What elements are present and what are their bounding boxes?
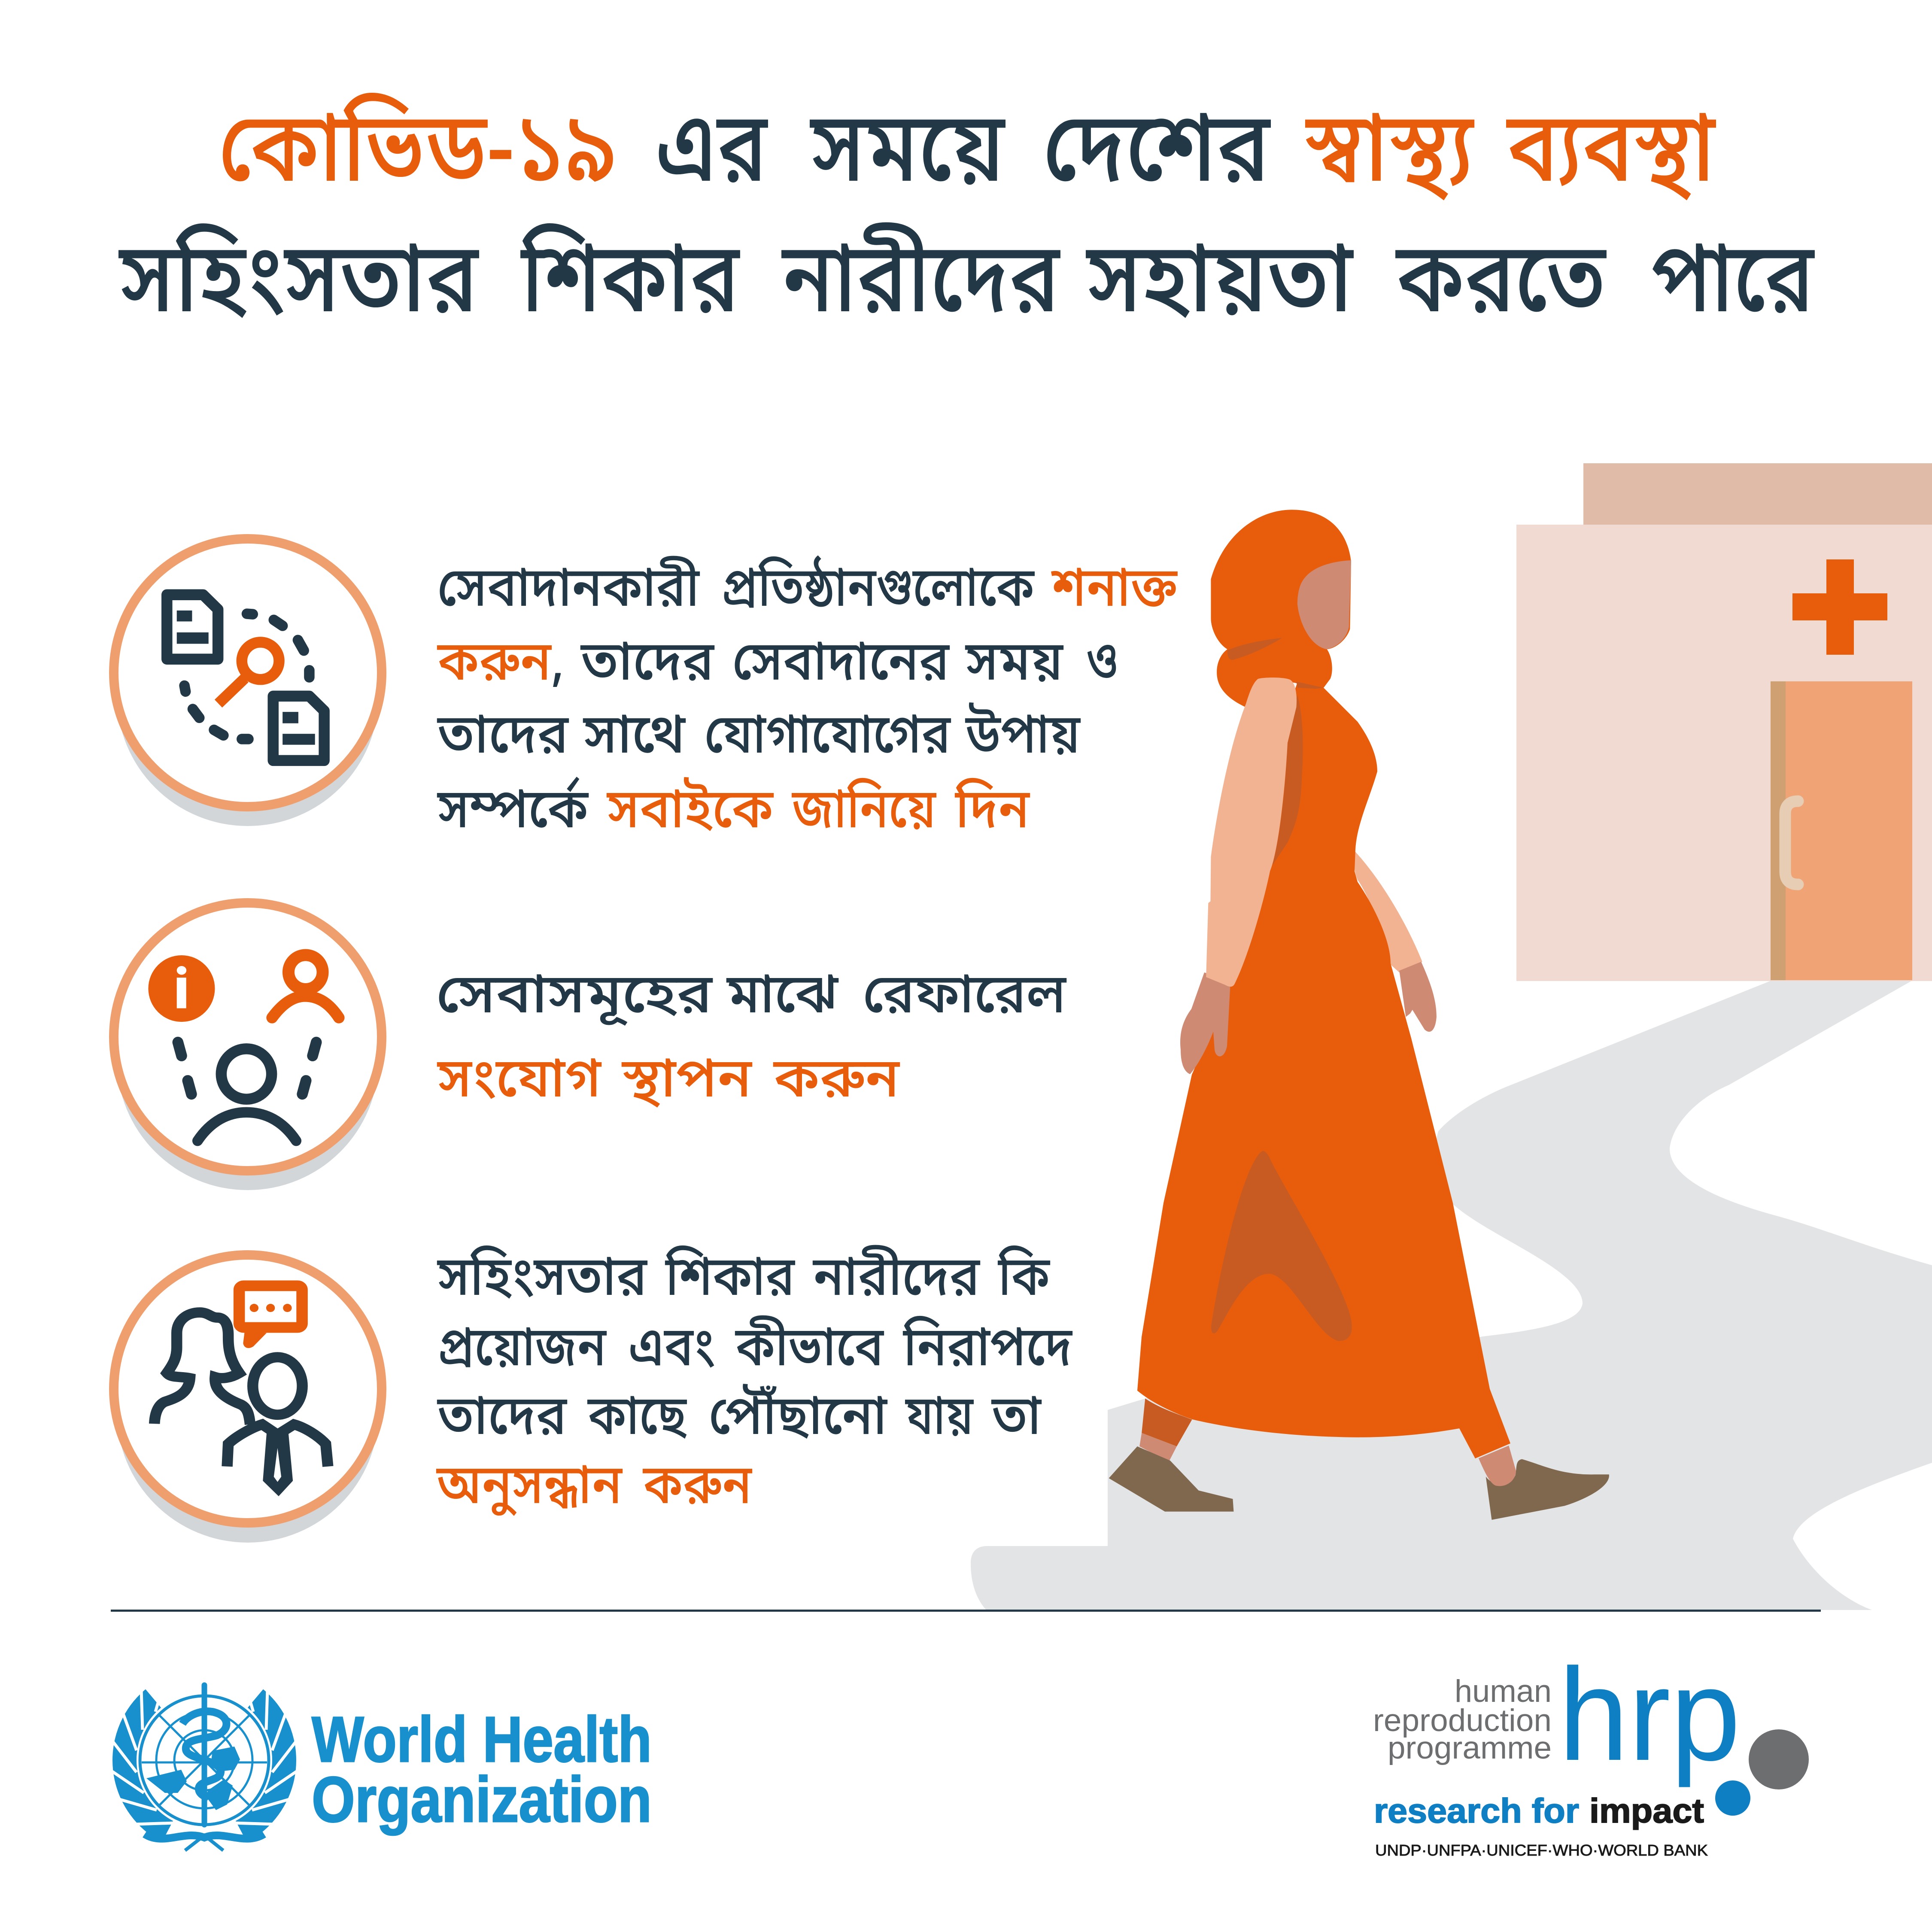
title: সহায়তা xyxy=(1085,222,1354,352)
text: survivor needs: কীভাবে xyxy=(735,1315,884,1388)
text: referral links: করুন xyxy=(773,1047,900,1119)
title xyxy=(118,91,1815,352)
text: survivor needs: করুন xyxy=(642,1453,753,1526)
programme name: reproduction xyxy=(1373,1703,1552,1738)
text: identify services: সম্পর্কে xyxy=(437,777,589,850)
text: identify services: উপায় xyxy=(965,702,1081,775)
text: identify services: যোগাযোগের xyxy=(704,703,951,775)
front hand xyxy=(1180,972,1230,1074)
icon: information and people xyxy=(114,903,382,1190)
woman walking xyxy=(1109,510,1609,1520)
hrp wordmark: hrp xyxy=(1558,1641,1741,1789)
title: স্বাস্থ্য xyxy=(1305,91,1475,221)
icon: documents and magnifier xyxy=(114,539,382,826)
text: identify services: সবাইকে xyxy=(606,777,774,850)
panel: survivor needs xyxy=(114,1245,1073,1543)
World Health Organization wordmark: Organization xyxy=(312,1763,652,1835)
text: survivor needs: নিরাপদে xyxy=(902,1315,1073,1388)
text: identify services: করুন xyxy=(437,630,552,702)
text: survivor needs: পৌঁছানো xyxy=(708,1384,887,1457)
title: পারে xyxy=(1651,222,1815,352)
title: কোভিড-১৯ xyxy=(218,91,617,221)
text: survivor needs: এবং xyxy=(629,1315,715,1388)
tagline: research for xyxy=(1374,1792,1579,1830)
text: referral links: মাঝে xyxy=(726,963,839,1035)
text: survivor needs: প্রয়োজন xyxy=(437,1315,607,1388)
text: referral links: স্থাপন xyxy=(621,1047,753,1119)
programme name: programme xyxy=(1388,1731,1552,1765)
text: referral links: সেবাসমূহের xyxy=(436,963,713,1035)
panel: identify services xyxy=(114,539,1178,850)
door xyxy=(1771,681,1912,980)
skirt fold xyxy=(1211,1151,1352,1341)
title: শিকার xyxy=(520,222,740,352)
World Health Organization wordmark xyxy=(312,1703,652,1835)
text: identify services: তাদের xyxy=(437,703,569,775)
WHO logo xyxy=(110,1673,652,1850)
text: identify services: সাথে xyxy=(583,703,686,775)
title: সময়ে xyxy=(809,91,1006,221)
text: identify services: সময় xyxy=(965,630,1064,702)
text: survivor needs xyxy=(436,1245,1073,1526)
programme name: human xyxy=(1455,1674,1552,1709)
text: identify services: দিন xyxy=(954,778,1030,850)
text: survivor needs: কি xyxy=(997,1245,1050,1318)
panel: referral links xyxy=(114,903,1066,1190)
text: referral links: সংযোগ xyxy=(437,1047,602,1119)
tagline xyxy=(1374,1792,1704,1830)
dress xyxy=(1137,682,1510,1458)
text: survivor needs: কাছে xyxy=(587,1384,687,1457)
tagline: impact xyxy=(1589,1792,1704,1830)
text: identify services: , xyxy=(551,630,564,702)
text: survivor needs: তা xyxy=(991,1384,1042,1457)
text: identify services: সেবাদানের xyxy=(732,630,950,702)
text: survivor needs: সহিংসতার xyxy=(437,1245,647,1318)
title: এর xyxy=(656,91,768,221)
text: identify services: সেবাদানকারী xyxy=(437,556,700,629)
back leg and shoe xyxy=(1109,1398,1233,1512)
HRP logo xyxy=(1373,1641,1809,1859)
text: survivor needs: অনুসন্ধান xyxy=(436,1453,623,1526)
title: করতে xyxy=(1395,222,1607,352)
text: referral links xyxy=(436,963,1066,1119)
text: identify services xyxy=(437,555,1178,850)
title: নারীদের xyxy=(781,222,1060,352)
text: identify services: তাদের xyxy=(580,630,714,702)
cosponsors: UNDP·UNFPA·UNICEF·WHO·WORLD BANK xyxy=(1375,1841,1708,1859)
icon: medical cross xyxy=(1792,559,1887,655)
road xyxy=(971,981,1932,1610)
front foot xyxy=(1479,1446,1609,1520)
text: identify services: প্রতিষ্ঠানগুলোকে xyxy=(721,555,1035,629)
icon: two people talking xyxy=(114,1255,382,1543)
hospital building xyxy=(1516,463,1932,981)
text: identify services: জানিয়ে xyxy=(791,778,937,850)
text: survivor needs: নারীদের xyxy=(812,1245,980,1318)
text: referral links: রেফারেল xyxy=(863,963,1066,1035)
programme name xyxy=(1373,1674,1552,1765)
logo dots xyxy=(1715,1729,1809,1816)
text: identify services: ও xyxy=(1086,630,1118,702)
World Health Organization wordmark: World Health xyxy=(312,1703,652,1775)
title: ব্যবস্থা xyxy=(1506,91,1716,221)
upper body xyxy=(1206,510,1351,987)
back arm xyxy=(1354,851,1437,1032)
text: identify services: শনাক্ত xyxy=(1051,556,1178,629)
text: survivor needs: যায় xyxy=(905,1384,974,1457)
icon: WHO emblem xyxy=(110,1673,298,1850)
title: সহিংসতার xyxy=(118,222,479,352)
text: survivor needs: তাদের xyxy=(437,1384,567,1457)
text: survivor needs: শিকার xyxy=(665,1245,795,1318)
title: দেশের xyxy=(1042,91,1271,221)
